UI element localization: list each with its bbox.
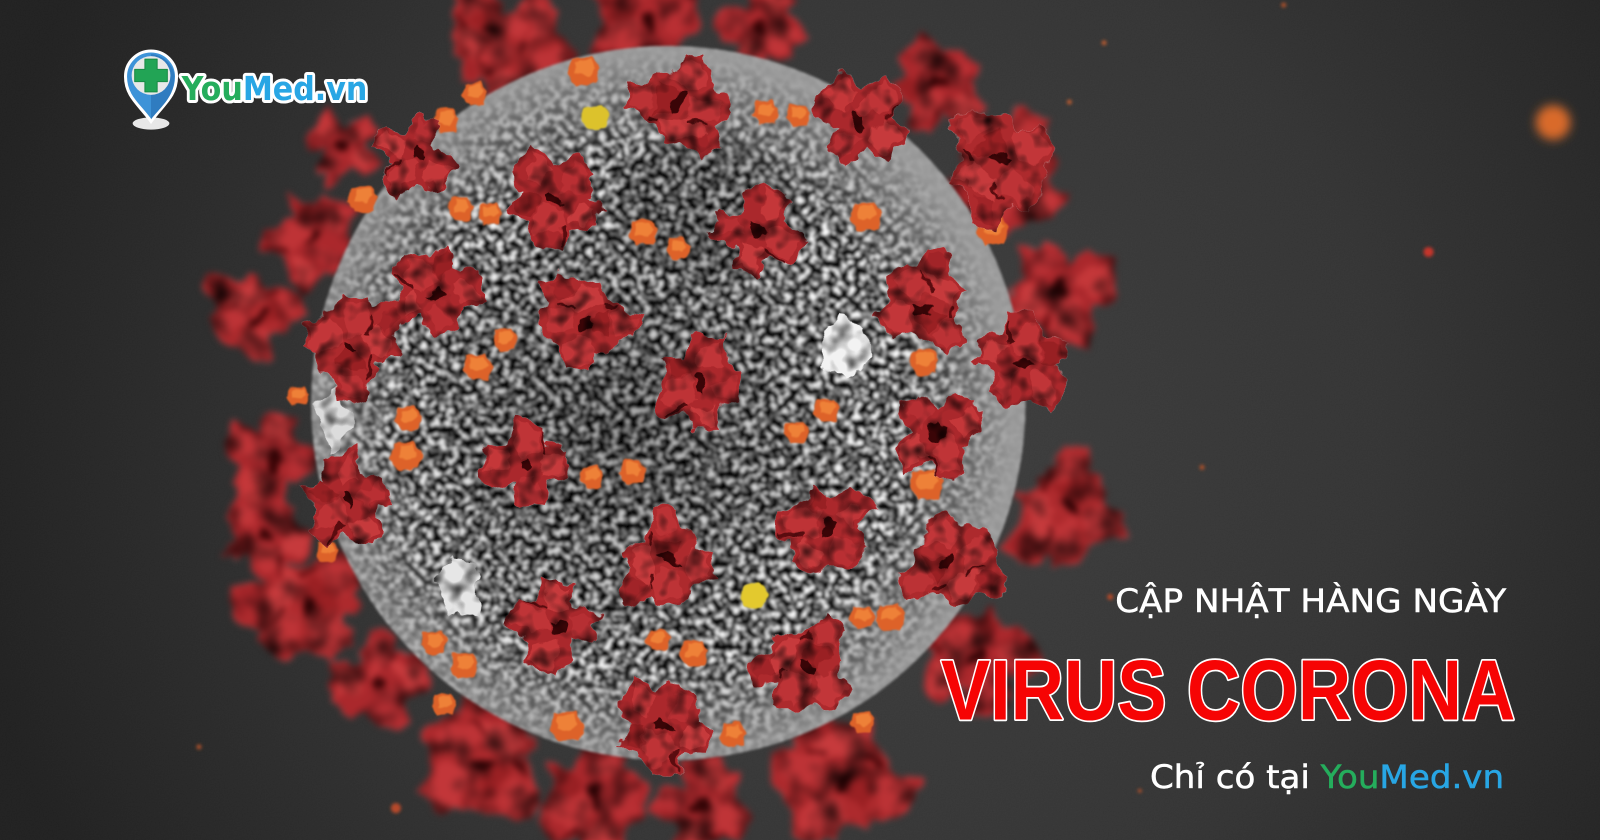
icon: location pin with cross [126, 51, 177, 130]
sub-heading: daily updates: CẬP NHẬT HÀNG NGÀY [1115, 582, 1507, 620]
logo wordmark: YouMed.vn [181, 70, 367, 108]
orange and yellow knobs [287, 57, 1009, 747]
virus illustration [200, 0, 1146, 840]
YouMed logo [126, 51, 367, 130]
in-focus red spikes [282, 41, 1087, 789]
tagline: Chỉ có tại YouMed.vn [1150, 760, 1504, 796]
white surface patches [312, 314, 870, 618]
blurred outer spikes [200, 0, 1146, 840]
main title: VIRUS CORONA [941, 642, 1515, 738]
sphere surface [296, 31, 1041, 776]
